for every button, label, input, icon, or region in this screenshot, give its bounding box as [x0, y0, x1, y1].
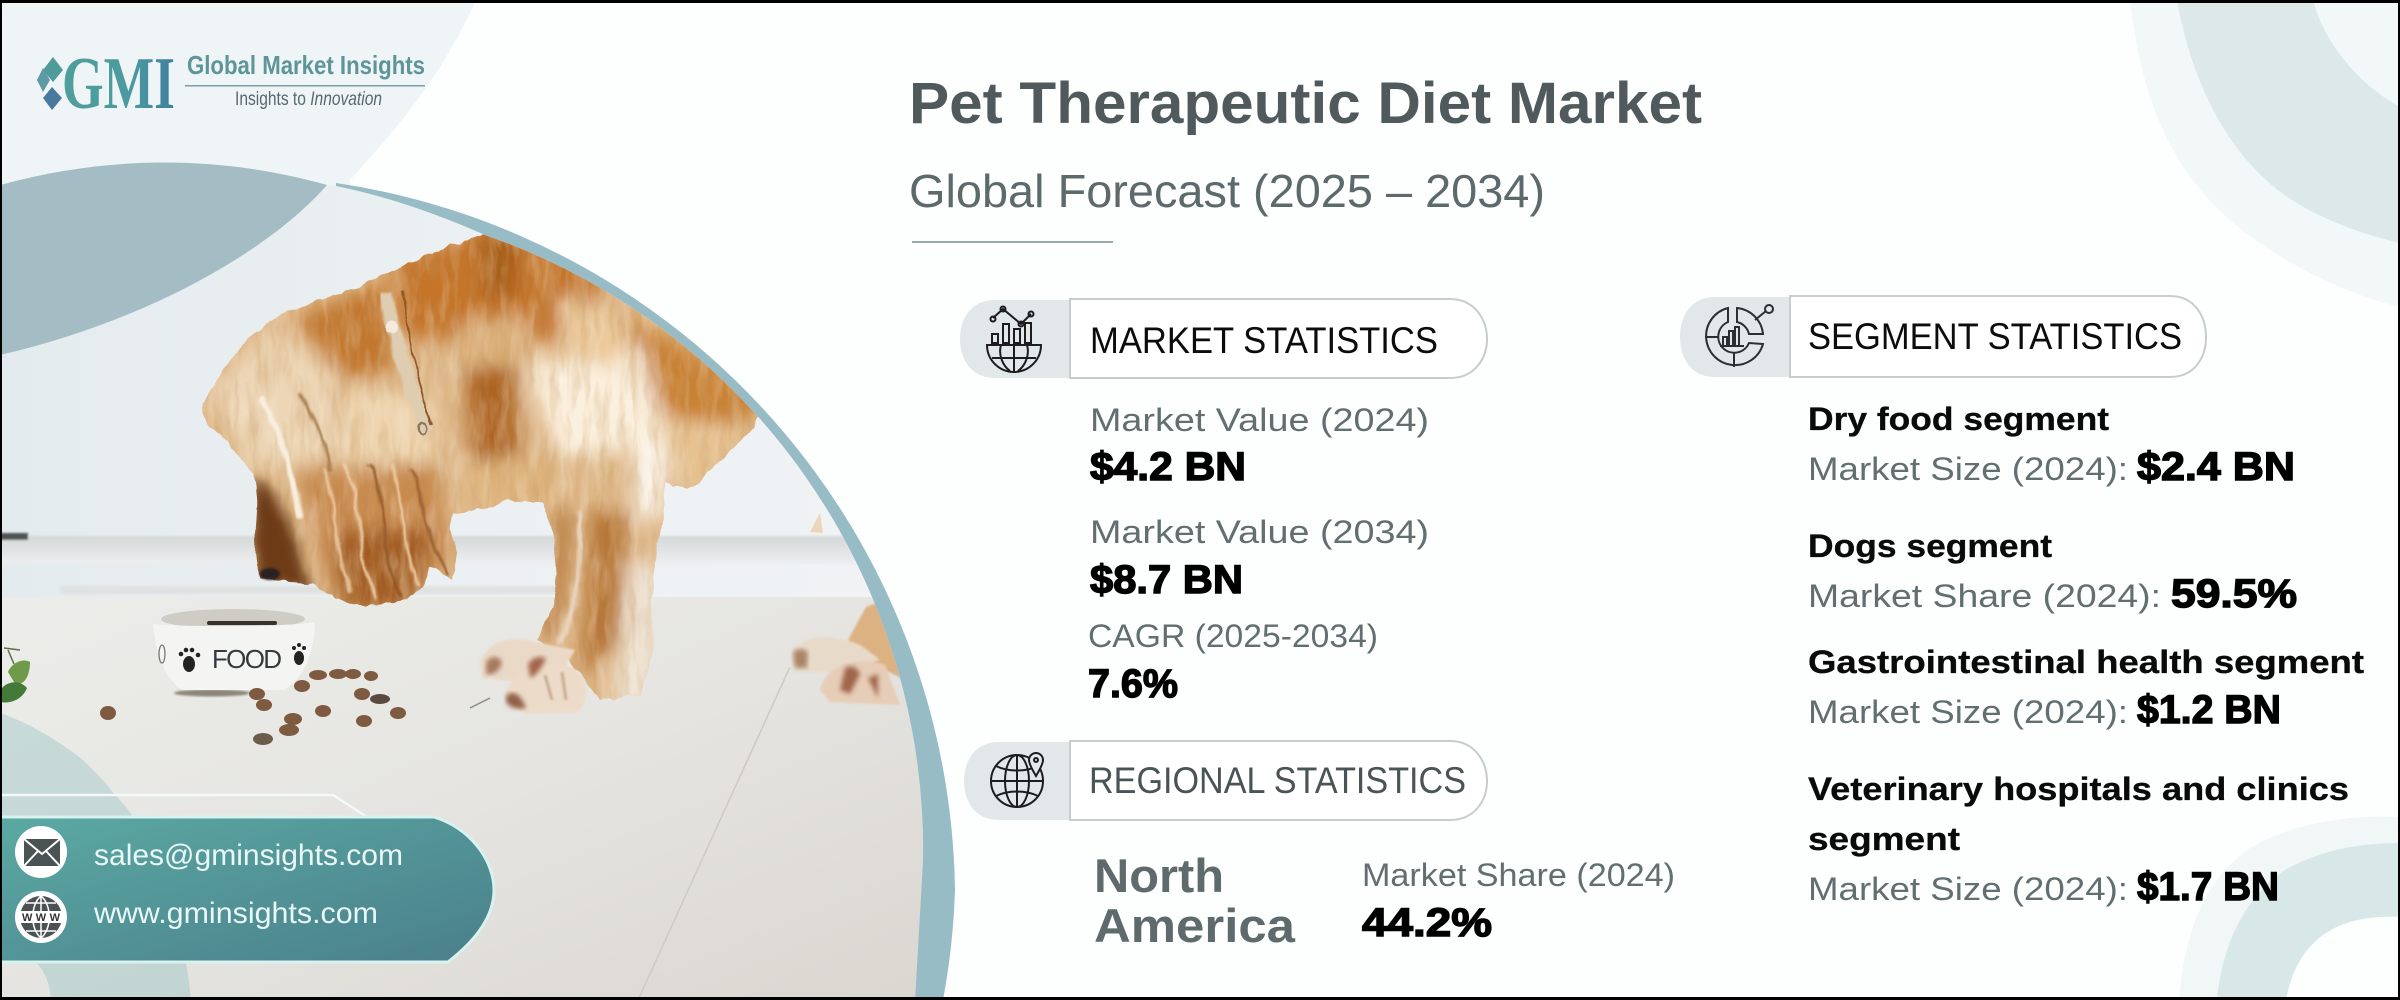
lower-left translucent ring — [0, 713, 191, 1000]
plant — [0, 648, 30, 702]
rear fur — [660, 420, 750, 490]
segment: dry food: Dry food segment — [1808, 401, 2109, 437]
tail tuft — [810, 513, 823, 533]
stat: CAGR: 7.6% — [1088, 662, 1178, 706]
contact pill — [0, 817, 494, 962]
segment: dry food: $2.4 BN — [2137, 445, 2295, 489]
logo — [37, 43, 425, 125]
rump orange — [625, 315, 785, 425]
bowl label: FOOD — [212, 644, 282, 674]
muzzle shadow — [252, 478, 317, 590]
email: sales@gminsights.com — [94, 839, 403, 872]
head orange — [295, 280, 395, 378]
stat: regional market share: Market Share (2024) — [1362, 857, 1675, 893]
bowl body — [153, 622, 315, 690]
kibble — [100, 669, 406, 745]
heading pill: regional statistics — [964, 741, 1487, 820]
near leg — [580, 510, 628, 680]
segment: gastrointestinal health — [1808, 644, 2364, 732]
fur texture light — [210, 237, 742, 700]
background: bottom-right inner — [2286, 917, 2400, 1000]
website: www.gminsights.com — [93, 897, 378, 930]
region name line 2: America — [1094, 899, 1296, 952]
stat: market value 2024: $4.2 BN — [1090, 445, 1246, 489]
stat: regional market share — [1362, 857, 1675, 945]
bowl inside — [161, 609, 305, 626]
stat: market value 2024 — [1090, 402, 1429, 489]
segment: gastrointestinal health: Gastrointestinal health segment — [1808, 644, 2364, 680]
stat: market value 2024: Market Value (2024) — [1090, 402, 1429, 438]
neck cream — [345, 390, 440, 465]
stat: market value 2034: Market Value (2034) — [1090, 514, 1429, 550]
segment: veterinary hospitals and clinics: segment — [1808, 821, 1960, 857]
bowl shadow — [174, 690, 250, 696]
heading text: SEGMENT STATISTICS — [1808, 316, 2182, 357]
segment: dogs: Dogs segment — [1808, 528, 2052, 564]
segment: veterinary hospitals and clinics: $1.7 BN — [2137, 865, 2279, 909]
logo name: Global Market Insights — [187, 50, 425, 80]
segment: dry food — [1808, 401, 2295, 489]
photo: dog eating from a bowl — [0, 150, 960, 1000]
segment: veterinary hospitals and clinics — [1808, 771, 2349, 909]
collar ring — [418, 423, 428, 433]
background: top-right pale arc — [2130, 0, 2400, 307]
gap between legs — [558, 510, 580, 645]
collar — [385, 292, 428, 432]
lens shape top-left — [0, 162, 327, 355]
floor scuff — [470, 698, 490, 708]
heading pill: segment statistics — [1680, 296, 2206, 377]
segment: veterinary hospitals and clinics: Market Size (2024): — [1808, 871, 2128, 907]
heading text: MARKET STATISTICS — [1090, 320, 1438, 361]
back orange — [390, 222, 600, 345]
stat: CAGR: CAGR (2025-2034) — [1088, 618, 1378, 654]
segment: gastrointestinal health: Market Size (2024): — [1808, 694, 2128, 730]
segment: dogs: Market Share (2024): — [1808, 578, 2161, 614]
background: bottom-right pale arc — [2179, 817, 2400, 1000]
ear — [295, 465, 450, 600]
segment: dogs: 59.5% — [2171, 572, 2297, 616]
teal crescent around photo — [336, 183, 955, 1000]
paw prints — [179, 643, 306, 672]
stat: CAGR — [1088, 618, 1378, 706]
partial letter — [159, 645, 165, 663]
icon: globe with pin — [991, 753, 1043, 807]
kibble in bowl — [207, 621, 277, 625]
back legs — [790, 600, 905, 705]
logo tagline: Insights to Innovation — [235, 89, 382, 110]
background: top-right arc — [2177, 0, 2400, 243]
stat: regional market share: 44.2% — [1362, 901, 1492, 945]
logo GMI letters: GMI — [62, 43, 175, 125]
icon: www globe — [15, 891, 67, 943]
stat: market value 2034 — [1090, 514, 1429, 602]
dog — [180, 220, 905, 730]
chest underside — [465, 455, 560, 510]
cream flank — [525, 345, 668, 458]
bowl — [153, 609, 315, 696]
background: top-left pale curve — [0, 0, 476, 400]
icon: chart on globe — [987, 306, 1041, 372]
segment: dogs — [1808, 528, 2297, 616]
front paws — [480, 639, 586, 714]
segment: veterinary hospitals and clinics: Veterinary hospitals and clinics — [1808, 771, 2349, 807]
skirting boards — [0, 533, 960, 594]
white chest — [632, 445, 668, 520]
fur texture dark — [206, 236, 752, 700]
nose — [260, 568, 280, 580]
heading pill: market statistics — [960, 299, 1487, 378]
icon: www globe: WWW — [22, 912, 61, 924]
collar buckle — [386, 321, 398, 333]
wall — [2, 189, 872, 597]
segment: gastrointestinal health: $1.2 BN — [2137, 688, 2281, 732]
logo diamonds — [37, 57, 63, 110]
region name: North — [1094, 849, 1224, 902]
title: Pet Therapeutic Diet Market — [909, 71, 1702, 136]
panel: market statistics — [960, 299, 1487, 706]
head cream — [205, 330, 345, 470]
faint outline — [0, 795, 367, 817]
icon: envelope — [15, 826, 67, 878]
panel: segment statistics — [1680, 296, 2364, 909]
chest orange stripe — [465, 350, 522, 492]
panel: regional statistics — [964, 741, 1675, 952]
heading text: REGIONAL STATISTICS — [1089, 760, 1466, 801]
stat: market value 2034: $8.7 BN — [1090, 558, 1243, 602]
background: bottom-right arc — [2217, 843, 2400, 1000]
title underline — [912, 241, 1113, 243]
logo rule — [185, 85, 425, 86]
icon: donut chart — [1705, 305, 1773, 367]
contact background — [0, 817, 494, 962]
dog body and head — [202, 234, 758, 700]
floor — [0, 597, 960, 1000]
subtitle: Global Forecast (2025 – 2034) — [909, 165, 1545, 217]
floor seam — [638, 667, 790, 1000]
segment: dry food: Market Size (2024): — [1808, 451, 2128, 487]
long ear strands — [262, 395, 448, 598]
